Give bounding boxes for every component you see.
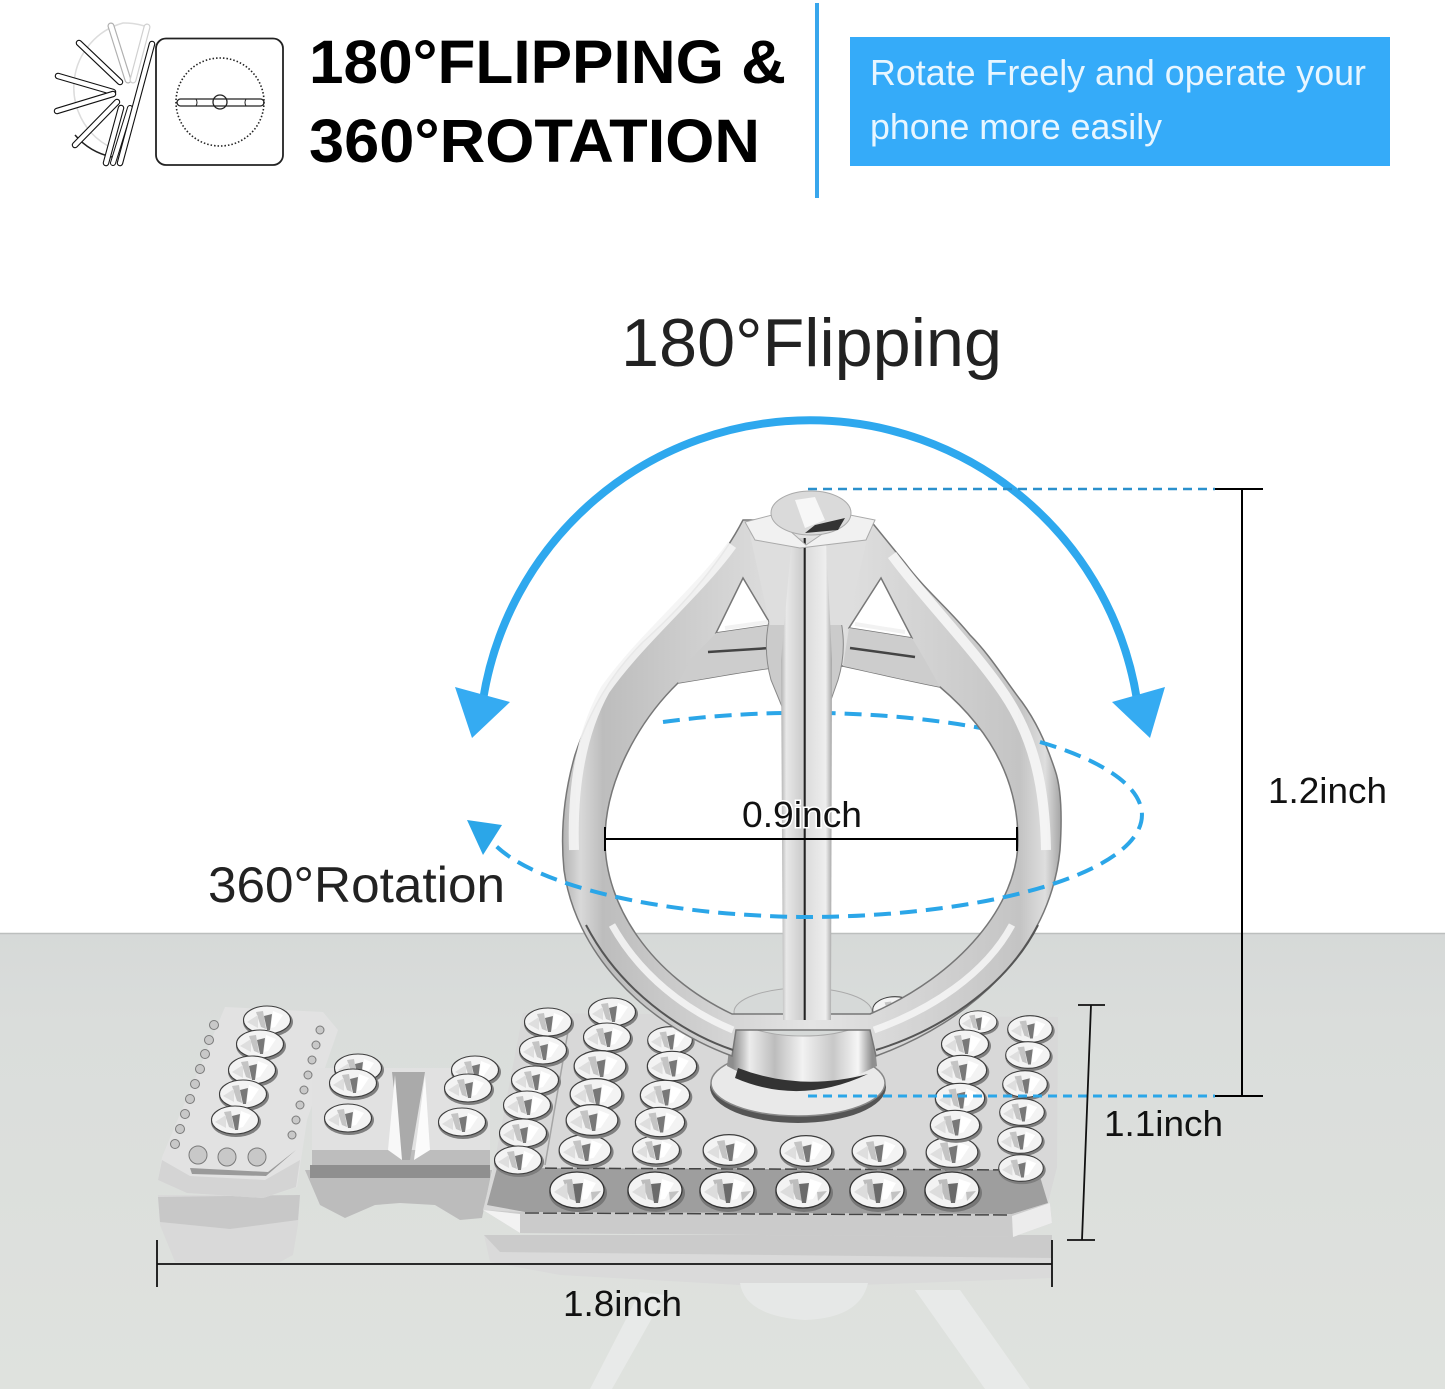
bottom dashed height guide <box>808 1094 1215 1098</box>
dimension: width 1.1 inch <box>1067 1005 1223 1240</box>
dimension: height 1.2 inch: 1.2inch <box>1268 770 1387 811</box>
dimension: length 1.8 inch: 1.8inch <box>563 1283 682 1324</box>
product: main jewelled plate <box>483 997 1058 1237</box>
icon: flipping and rotation ring <box>57 23 283 165</box>
floor reflection of product <box>158 1170 1052 1389</box>
product: ring centre band and setting <box>745 491 875 1020</box>
heading: 180 flipping: 180°Flipping <box>621 305 1002 381</box>
arrow: 180 degree flip arc <box>455 420 1165 738</box>
callout: rotate freely: phone more easily <box>870 106 1162 147</box>
dimension: height 1.2 inch <box>1215 489 1387 1096</box>
label: 360 rotation: 360°Rotation <box>208 857 505 913</box>
product: ring loop <box>563 520 1061 1056</box>
title <box>309 28 786 175</box>
rotation path: rear dashes <box>663 713 1040 742</box>
callout: rotate freely <box>850 37 1390 166</box>
background: grey reflective floor <box>0 933 1445 1389</box>
product: left hinge block <box>158 1006 501 1198</box>
title: 180°FLIPPING & <box>309 28 786 96</box>
header divider <box>815 3 819 198</box>
dimension: ring inner width: 0.9inch <box>742 794 862 835</box>
rotation path: front dashes with arrow <box>467 742 1142 917</box>
dimension: length 1.8 inch <box>157 1240 1052 1324</box>
top dashed height guide <box>808 488 1215 490</box>
callout: rotate freely: Rotate Freely and operate your <box>870 52 1366 93</box>
title: 360°ROTATION <box>309 107 760 175</box>
dimension: ring inner width <box>605 794 1017 851</box>
product: swivel base <box>710 988 886 1123</box>
dimension: width 1.1 inch: 1.1inch <box>1104 1103 1223 1144</box>
